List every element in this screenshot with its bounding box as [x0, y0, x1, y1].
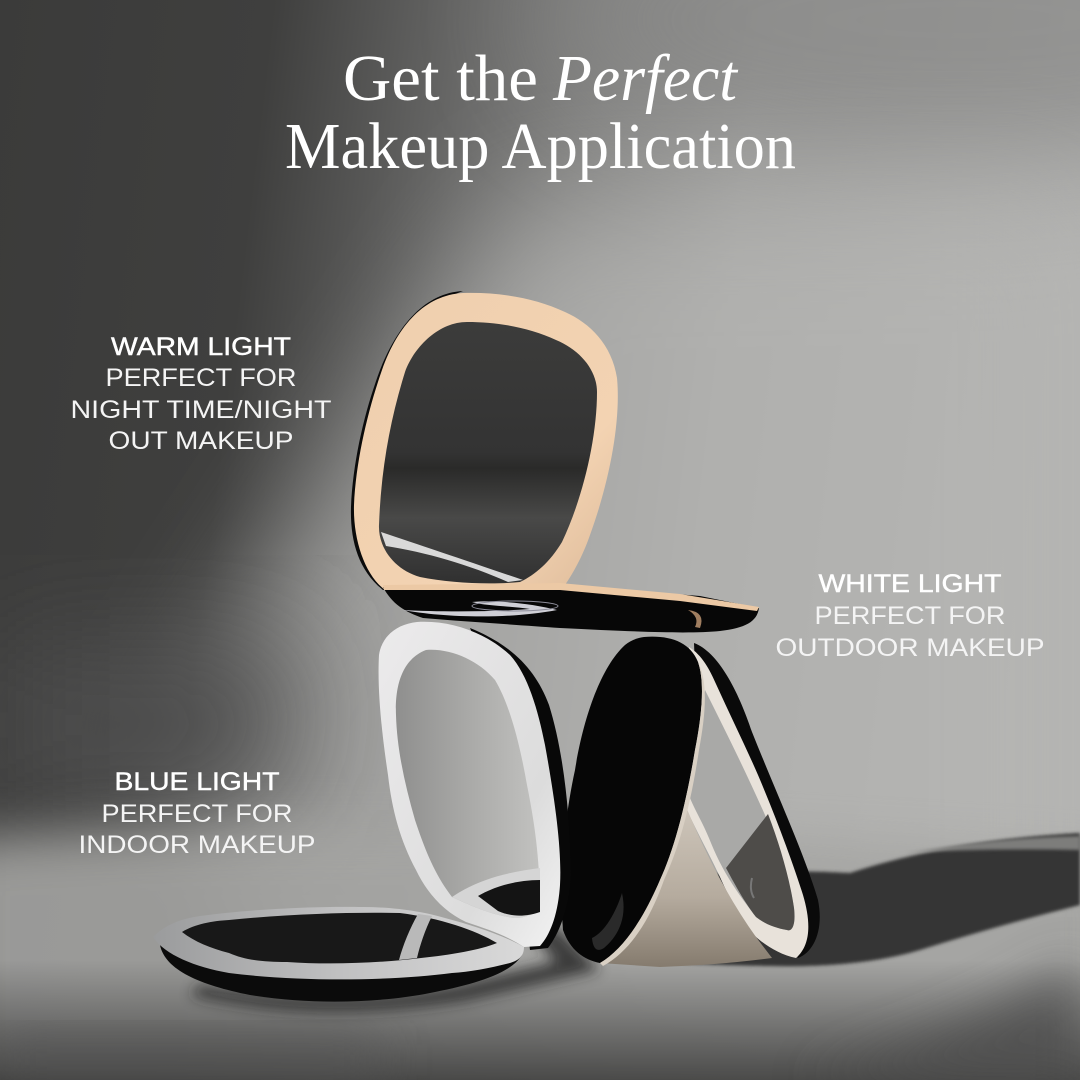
label: warm light: WARM LIGHT — [111, 333, 291, 361]
top warm-light mirror — [351, 291, 618, 590]
label: warm light: NIGHT TIME/NIGHT — [70, 396, 332, 424]
black middle mirror standing — [562, 637, 705, 966]
floor shadow to the right of the mirrors — [640, 833, 1080, 966]
title: Makeup Application — [285, 110, 796, 183]
right mirror leaning (white light) — [680, 643, 820, 958]
title — [285, 42, 796, 183]
label: white light: OUTDOOR MAKEUP — [776, 634, 1044, 662]
label: blue light — [78, 768, 316, 859]
label: warm light: PERFECT FOR — [106, 364, 296, 392]
flat mirror on floor — [153, 907, 524, 1002]
shadow under flat mirror — [190, 920, 600, 1011]
label: blue light: PERFECT FOR — [102, 800, 292, 828]
title: Get the — [343, 42, 538, 115]
title: Perfect — [552, 42, 739, 115]
cream light pool under leaning mirror — [600, 792, 772, 967]
base of warm-light mirror — [383, 583, 759, 632]
white mirror standing — [379, 622, 571, 950]
label: white light: WHITE LIGHT — [818, 570, 1002, 598]
label: white light — [776, 570, 1044, 662]
label: warm light: OUT MAKEUP — [108, 427, 294, 455]
label: white light: PERFECT FOR — [814, 602, 1006, 630]
label: blue light: BLUE LIGHT — [114, 768, 280, 796]
label: warm light — [70, 333, 332, 455]
label: blue light: INDOOR MAKEUP — [78, 831, 316, 859]
